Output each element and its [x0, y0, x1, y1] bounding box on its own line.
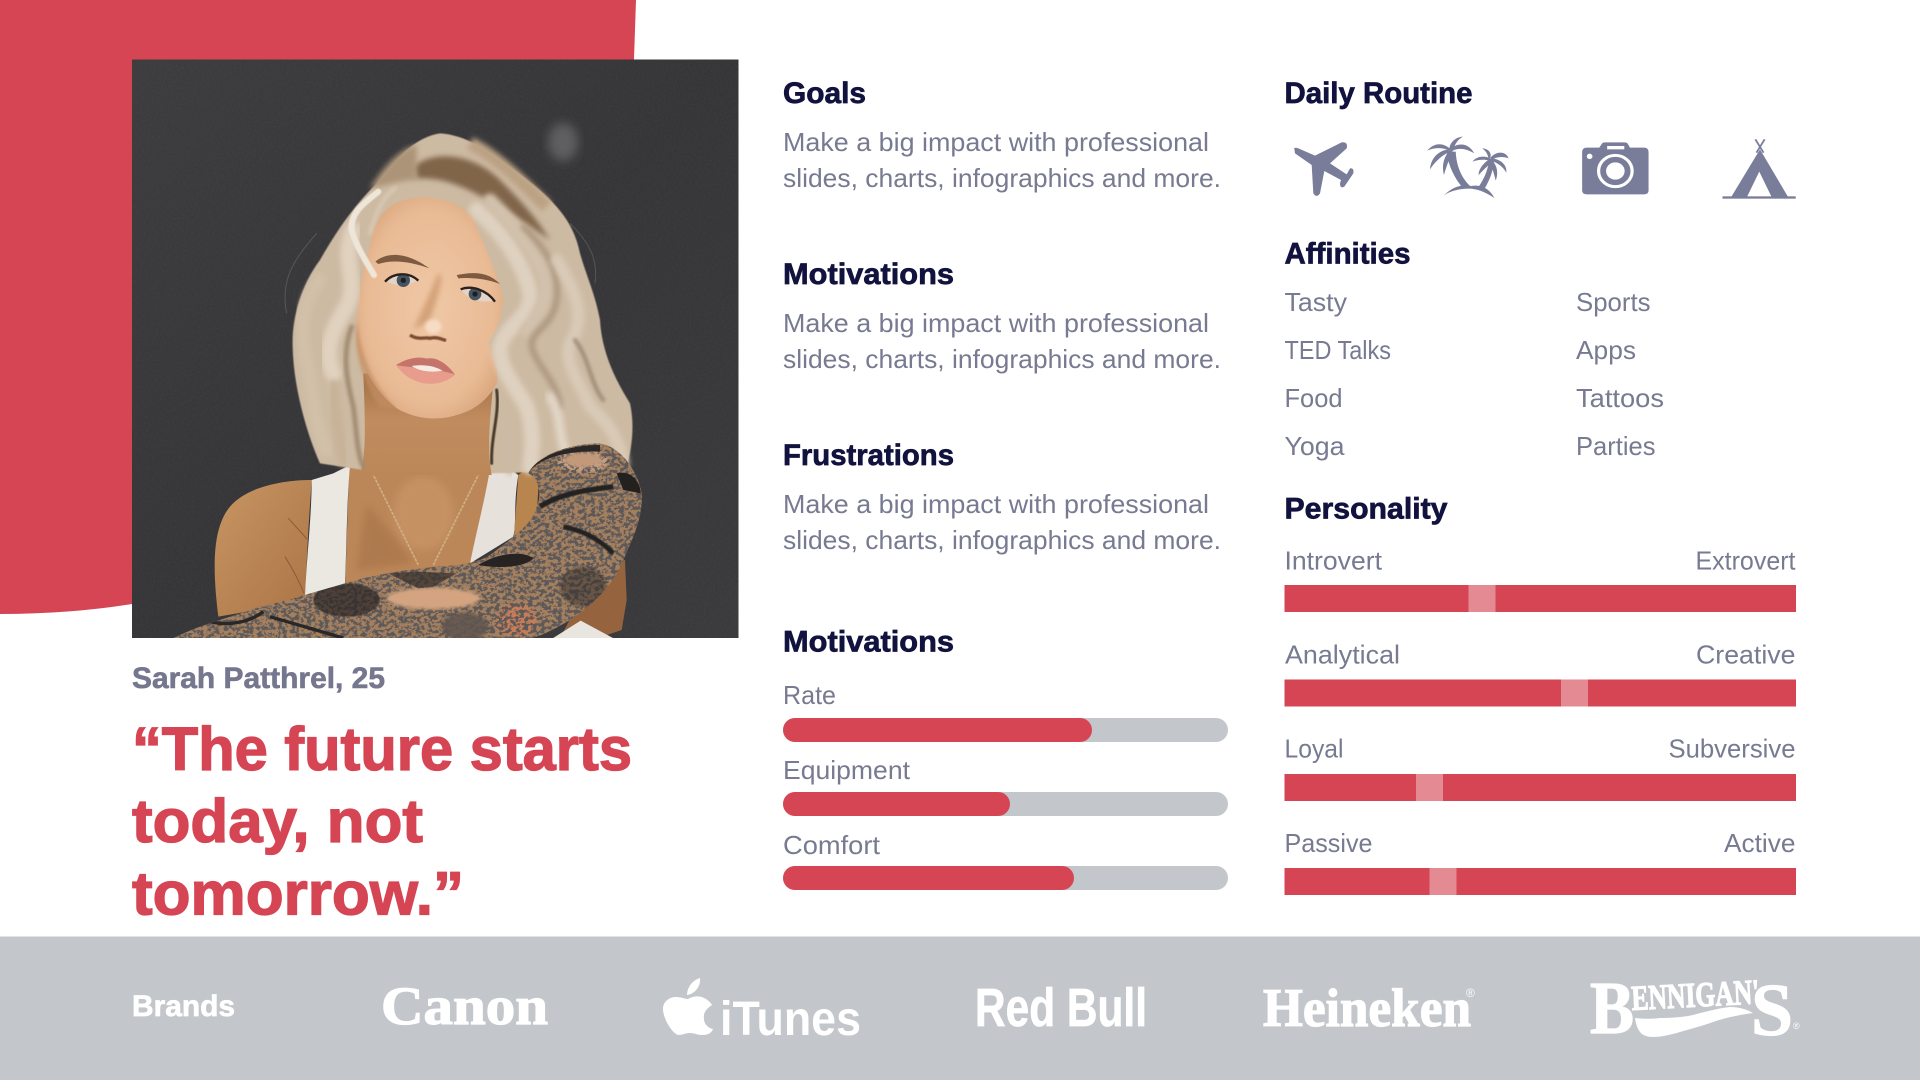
panel: brands band — [0, 936, 1920, 1080]
text block: Make a big impact with professional — [783, 127, 1209, 157]
panel: motivations — [783, 258, 1221, 374]
scale: loyal to subversive: Loyal — [1284, 734, 1344, 764]
logo: itunes — [663, 978, 861, 1046]
bar: comfort: Comfort — [783, 830, 881, 860]
name: Sarah Patthrel, 25 — [132, 662, 385, 695]
panel: goals — [783, 77, 1221, 193]
bar: rate: Rate — [783, 680, 836, 710]
scale: passive to active — [1284, 828, 1796, 895]
bar: comfort — [783, 830, 1228, 890]
quote — [132, 715, 632, 928]
logo: bennigan's: ® — [1793, 1021, 1800, 1031]
heading: Frustrations — [783, 439, 954, 472]
text block: slides, charts, infographics and more. — [783, 344, 1221, 374]
head and hair — [285, 133, 632, 475]
affinities list: Tasty — [1284, 287, 1347, 317]
daily routine icons — [1294, 137, 1796, 199]
scale: loyal to subversive: Subversive — [1668, 734, 1796, 764]
text block — [783, 127, 1221, 193]
scale: passive to active: Passive — [1284, 828, 1372, 858]
torso — [214, 466, 627, 638]
affinities list: Parties — [1576, 431, 1656, 461]
tattooed arm — [170, 440, 650, 641]
affinities list: Yoga — [1284, 431, 1345, 461]
bar: equipment — [783, 755, 1228, 816]
scale: introvert to extrovert — [1284, 546, 1796, 612]
icon: palm trees — [1427, 137, 1509, 198]
logo: bennigan's: S — [1751, 970, 1793, 1052]
logo: heineken: ® — [1466, 986, 1475, 1000]
face — [357, 197, 503, 418]
text block: Make a big impact with professional — [783, 308, 1209, 338]
bar: equipment: Equipment — [783, 755, 911, 785]
affinities list: Sports — [1576, 287, 1650, 317]
text block — [783, 308, 1221, 374]
scale: introvert to extrovert: Extrovert — [1696, 546, 1796, 576]
logo: itunes: iTunes — [720, 993, 861, 1046]
logo: bennigan's: B — [1590, 968, 1634, 1050]
logo: bennigan's — [1590, 968, 1800, 1052]
scale: analytical to creative: Creative — [1696, 640, 1796, 670]
scale: analytical to creative — [1284, 640, 1796, 706]
affinities list — [1284, 287, 1664, 461]
neck — [360, 373, 493, 475]
logo: heineken: Heineken — [1263, 978, 1471, 1038]
text block: slides, charts, infographics and more. — [783, 163, 1221, 193]
bar: rate — [783, 680, 1228, 742]
heading: Motivations — [783, 258, 954, 291]
icon: tent — [1722, 139, 1796, 199]
heading: daily routine: Daily Routine — [1284, 77, 1472, 110]
quote: today, not — [132, 787, 423, 855]
text block — [783, 489, 1221, 555]
affinities list: Tattoos — [1576, 383, 1664, 413]
logo: red bull: Red Bull — [975, 978, 1147, 1038]
scale: introvert to extrovert: Introvert — [1284, 546, 1383, 576]
panel: motivations bars — [783, 626, 1228, 890]
scale: analytical to creative: Analytical — [1285, 640, 1400, 670]
icon: camera — [1582, 142, 1649, 194]
heading: Personality — [1284, 492, 1448, 526]
logo: bennigan's: ENNIGAN' — [1630, 972, 1760, 1018]
heading: Motivations — [783, 626, 954, 658]
text block: slides, charts, infographics and more. — [783, 525, 1221, 555]
affinities list: TED Talks — [1284, 335, 1391, 365]
affinities list: Apps — [1576, 335, 1636, 365]
scale: passive to active: Active — [1724, 828, 1796, 858]
eyes — [385, 274, 418, 287]
icon: plane — [1294, 142, 1354, 196]
hair strands — [303, 188, 623, 470]
heading: brands: Brands — [132, 990, 235, 1023]
heading: Goals — [783, 77, 866, 110]
quote: tomorrow.” — [132, 860, 464, 928]
eyebrows — [375, 255, 429, 268]
red background shape — [0, 0, 640, 614]
lips — [396, 358, 455, 384]
affinities list: Food — [1284, 383, 1342, 413]
heading: Affinities — [1284, 238, 1410, 270]
panel: personality — [1284, 492, 1796, 895]
scale: loyal to subversive — [1284, 734, 1796, 801]
portrait photo — [132, 60, 738, 641]
panel: frustrations — [783, 439, 1221, 555]
logo: canon: Canon — [381, 976, 548, 1036]
panel: affinities — [1284, 238, 1664, 461]
text block: Make a big impact with professional — [783, 489, 1209, 519]
quote: “The future starts — [132, 715, 632, 783]
